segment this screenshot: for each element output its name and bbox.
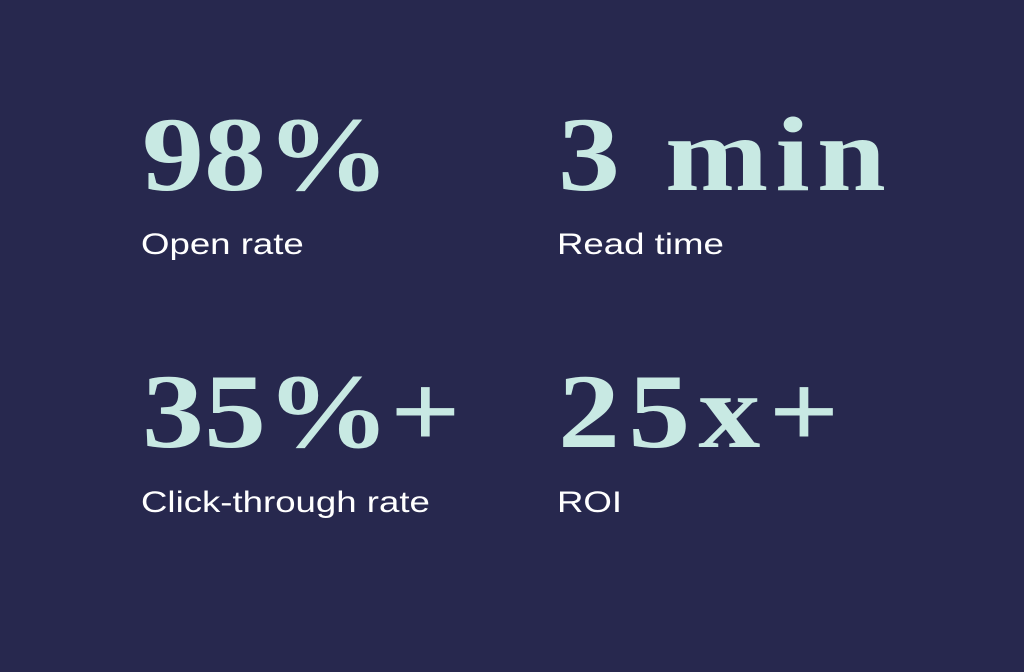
number: 35%+: 35%+	[142, 353, 461, 470]
stat: read time	[557, 96, 893, 261]
label: open rate: Open rate	[141, 228, 304, 261]
label: ROI: ROI	[557, 486, 622, 519]
number: 98%: 98%	[142, 96, 390, 213]
stat: click-through rate	[141, 353, 461, 519]
number: 3 min: 3 min	[558, 96, 893, 213]
number: 25x+: 25x+	[558, 353, 847, 470]
stat: ROI	[557, 353, 847, 519]
label: click-through rate: Click-through rate	[141, 486, 430, 519]
label: read time: Read time	[557, 228, 724, 261]
stat: open rate	[141, 96, 390, 261]
